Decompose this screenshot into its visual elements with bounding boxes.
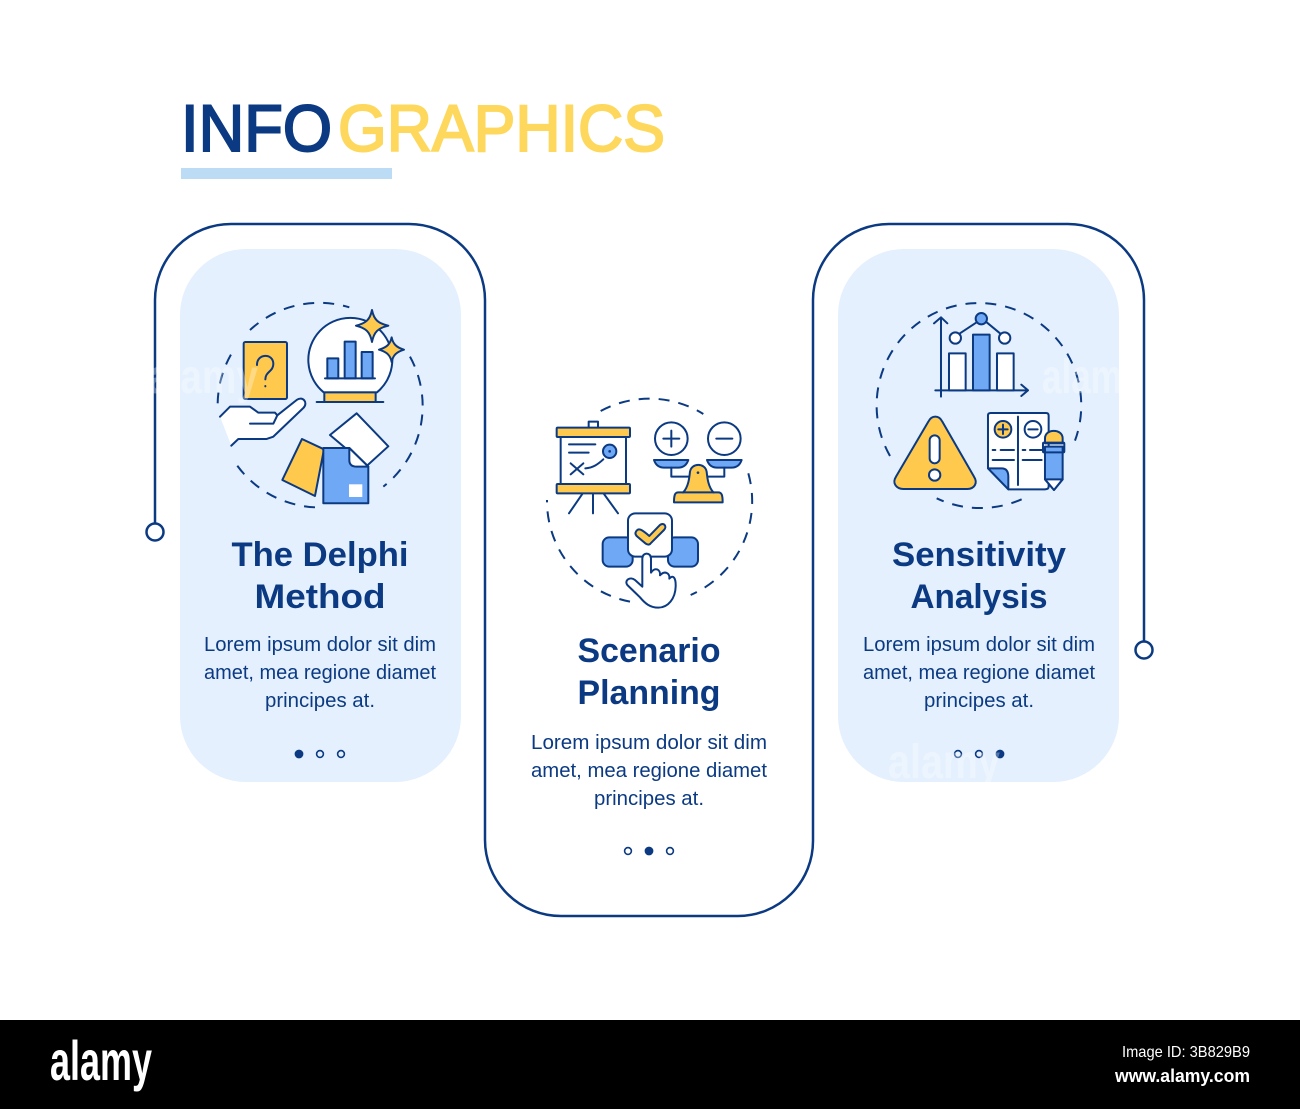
- footer bar: [0, 1020, 1300, 1109]
- body text: delphi: [204, 634, 436, 712]
- footer image id: Image ID: 3B829B9: [1122, 1044, 1250, 1061]
- title: INFO: [181, 91, 332, 165]
- heading: scenario: Planning: [578, 674, 720, 712]
- pagination dots: delphi: [295, 750, 344, 758]
- title underline: [181, 168, 392, 179]
- heading: sensitivity: [892, 536, 1066, 616]
- panel: delphi background: [180, 249, 461, 782]
- watermark text: alamy: [888, 736, 1000, 789]
- heading: delphi: The Delphi: [232, 536, 408, 574]
- heading: scenario: Scenario: [578, 632, 720, 670]
- watermark text: alam: [1042, 351, 1122, 404]
- icon: scenario planning: [547, 399, 752, 608]
- body text: sensitivity: [863, 634, 1095, 712]
- heading: sensitivity: Sensitivity: [892, 536, 1066, 574]
- heading: sensitivity: Analysis: [910, 578, 1048, 616]
- body text: sensitivity: principes at.: [924, 690, 1034, 712]
- pagination dots: sensitivity: [955, 750, 1004, 758]
- body text: scenario: amet, mea regione diamet: [531, 760, 767, 782]
- heading: scenario: [578, 632, 720, 712]
- watermark text: [148, 351, 1122, 789]
- connecting outline: [155, 224, 1144, 916]
- footer url: www.alamy.com: [1114, 1066, 1250, 1086]
- body text: scenario: principes at.: [594, 788, 704, 810]
- title: [181, 91, 665, 165]
- heading: delphi: Method: [254, 578, 386, 616]
- body text: delphi: Lorem ipsum dolor sit dim: [204, 634, 436, 656]
- body text: delphi: amet, mea regione diamet: [204, 662, 436, 684]
- pagination dots: scenario: [625, 847, 673, 855]
- watermark text: alamy: [148, 351, 258, 404]
- outline right end marker: [1136, 642, 1152, 658]
- body text: scenario: Lorem ipsum dolor sit dim: [531, 732, 767, 754]
- title: GRAPHICS: [338, 91, 665, 165]
- body text: delphi: principes at.: [265, 690, 375, 712]
- body text: scenario: [531, 732, 767, 810]
- icon: delphi method: [218, 303, 423, 507]
- panel: sensitivity background: [838, 249, 1119, 782]
- heading: delphi: [232, 536, 408, 616]
- footer logo: alamy: [50, 1029, 152, 1092]
- body text: sensitivity: Lorem ipsum dolor sit dim: [863, 634, 1095, 656]
- body text: sensitivity: amet, mea regione diamet: [863, 662, 1095, 684]
- icon: sensitivity analysis: [877, 303, 1081, 508]
- outline left end marker: [146, 524, 164, 540]
